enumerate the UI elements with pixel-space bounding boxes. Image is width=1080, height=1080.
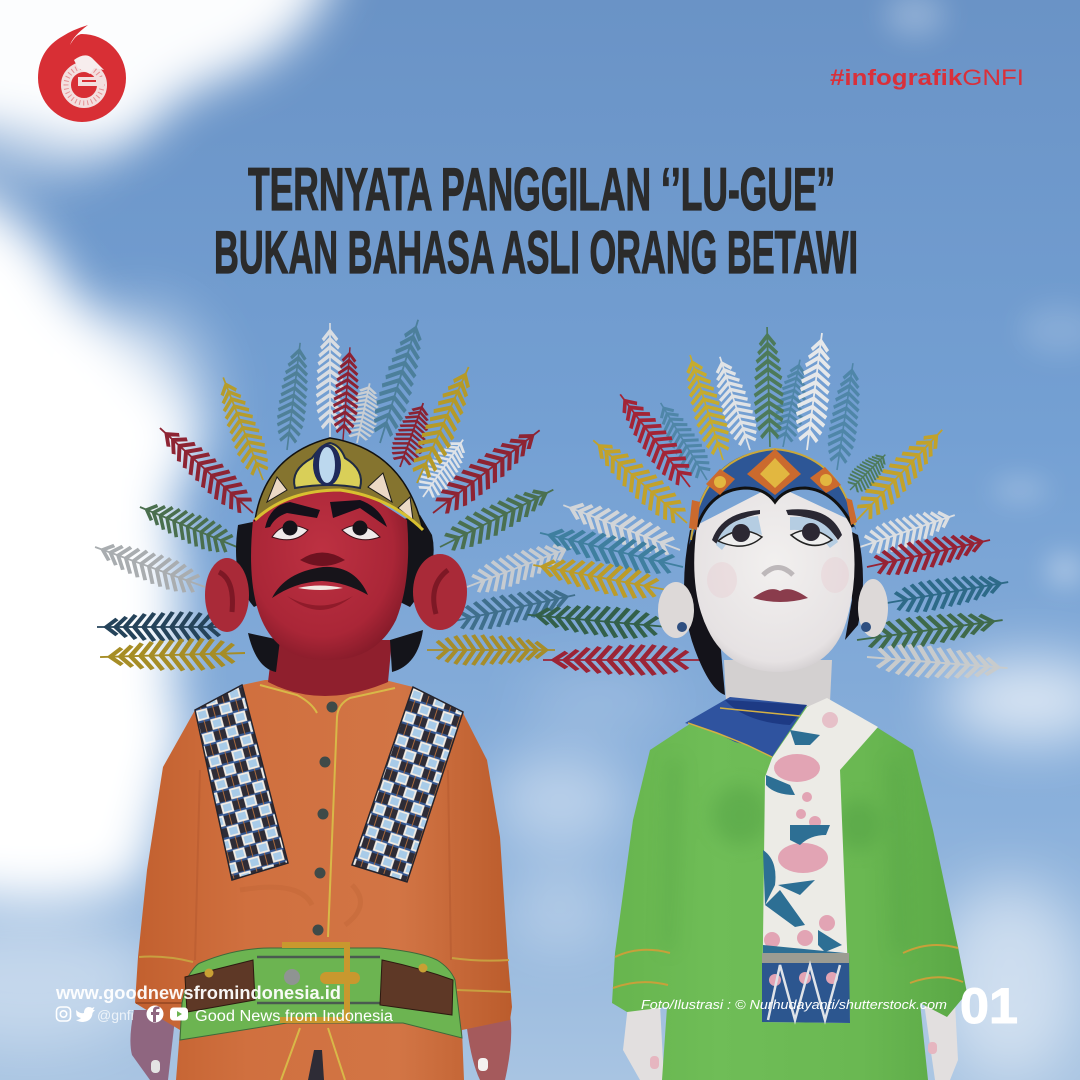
- footer website and social block: [55, 983, 393, 1025]
- male ondel-ondel figure: [90, 315, 578, 1080]
- social handle: @gnfi: [97, 1007, 134, 1023]
- male body shirt: [135, 680, 512, 1080]
- icon: twitter: [76, 1007, 95, 1022]
- male ears: [205, 554, 467, 632]
- website url: www.goodnewsfromindonesia.id: [55, 983, 341, 1003]
- dress shading and cuffs: [613, 760, 963, 988]
- female facial features: [707, 509, 849, 602]
- navy collar: [685, 697, 807, 757]
- female dress: [612, 700, 967, 1080]
- female hands: [623, 1003, 958, 1080]
- female ondel-ondel figure: [526, 327, 1011, 1080]
- female headdress feathers: [526, 327, 1011, 684]
- male headdress feathers: [90, 315, 578, 673]
- female face: [694, 485, 855, 672]
- coat opening: [281, 1028, 345, 1080]
- GNFI logo: [38, 25, 126, 122]
- sash flowers: [764, 712, 838, 986]
- female crown: [689, 449, 857, 545]
- white G emblem: [66, 55, 104, 103]
- shirt trim and buttons: [260, 685, 395, 937]
- female hair: [684, 530, 863, 695]
- hashtag: #infografik GNFI: [830, 65, 1024, 90]
- page name: Good News from Indonesia: [195, 1008, 393, 1025]
- male neck: [268, 640, 392, 696]
- icon: instagram: [56, 1007, 70, 1021]
- male facial features: [265, 500, 387, 610]
- female ears: [658, 579, 888, 638]
- male belt with pouches and buckle: [180, 945, 462, 1040]
- male hands: [130, 1010, 511, 1080]
- plaid shoulder straps: [195, 685, 463, 882]
- red swirl mark: [38, 25, 126, 122]
- page number: 01: [960, 978, 1018, 1034]
- shirt folds and cuffs: [136, 770, 511, 1003]
- photo credit: Foto/Ilustrasi : © Nurhudayanti/shutterstock.com: [641, 997, 947, 1012]
- male face: [251, 470, 408, 660]
- icon: youtube: [170, 1008, 188, 1020]
- male crown: [255, 438, 423, 530]
- female neck: [724, 660, 832, 708]
- title: [214, 156, 858, 286]
- icon: facebook: [146, 1006, 164, 1022]
- male hair: [236, 515, 434, 672]
- floral sash: [762, 698, 878, 1023]
